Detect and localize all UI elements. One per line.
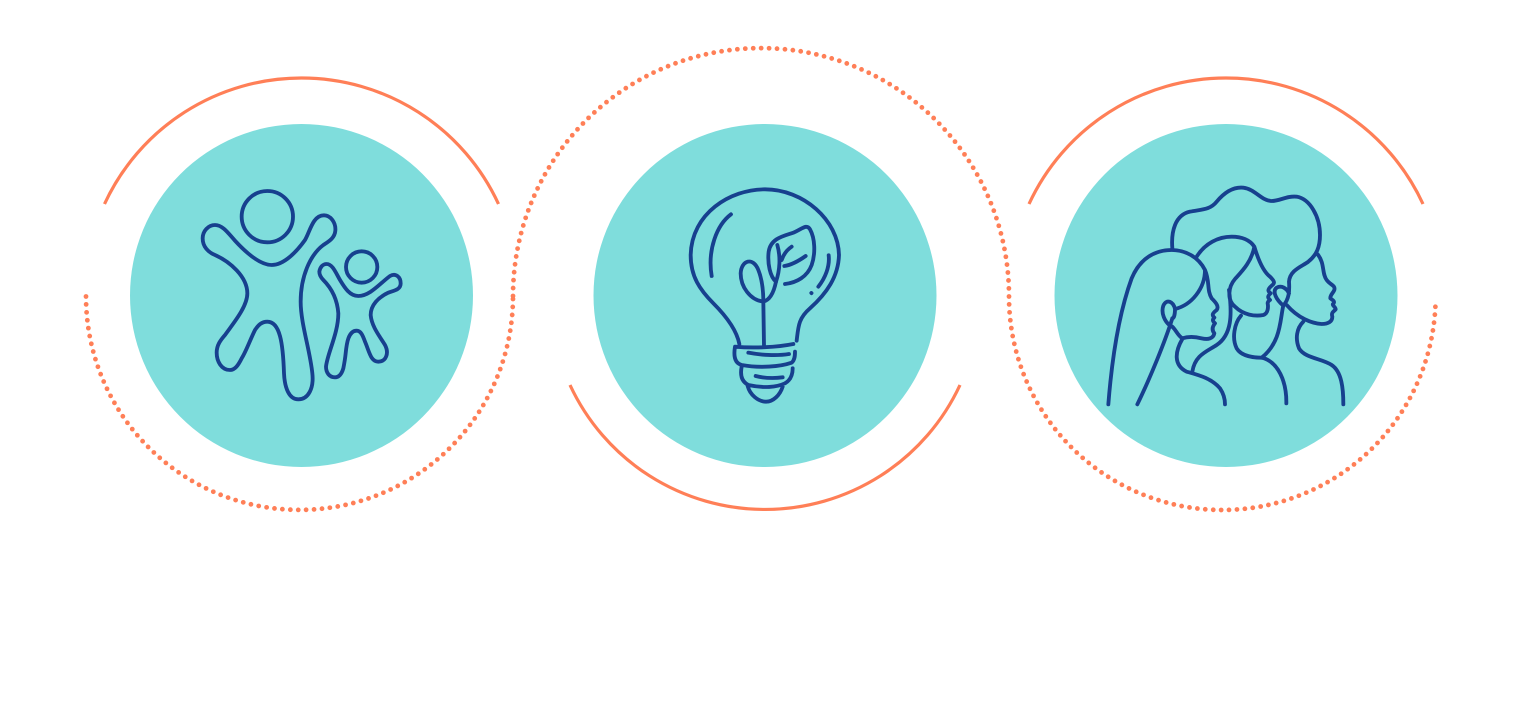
- stem and small leaf: [741, 262, 776, 346]
- adult body: [203, 215, 335, 399]
- large leaf: [768, 227, 814, 284]
- panel: left circle, children: [86, 78, 513, 510]
- right woman neck: [1297, 322, 1343, 404]
- child body: [319, 264, 401, 377]
- centre solid arc: [570, 385, 960, 509]
- right teal disc: [1054, 124, 1398, 467]
- middle woman: [1192, 237, 1286, 403]
- icon: adult and child jumping: [203, 191, 401, 399]
- bulb screw base: [734, 344, 795, 402]
- adult head: [242, 191, 293, 242]
- centre teal disc: [594, 124, 936, 467]
- panel: centre circle, idea: [513, 48, 1009, 509]
- panel: right circle, women: [1009, 78, 1436, 510]
- left solid arc: [104, 78, 498, 204]
- bulb highlights: [711, 214, 829, 293]
- left teal disc: [130, 124, 473, 467]
- child head: [346, 251, 377, 283]
- centre dotted arc: [513, 48, 1009, 296]
- right dotted arc: [1009, 296, 1436, 510]
- right solid arc: [1029, 78, 1423, 204]
- left dotted arc: [86, 296, 513, 510]
- icon: three women in profile: [1108, 188, 1343, 404]
- right woman hair and face: [1172, 188, 1336, 324]
- left woman: [1108, 250, 1225, 404]
- bulb outline: [691, 189, 839, 344]
- icon: light bulb with leaf: [691, 189, 839, 402]
